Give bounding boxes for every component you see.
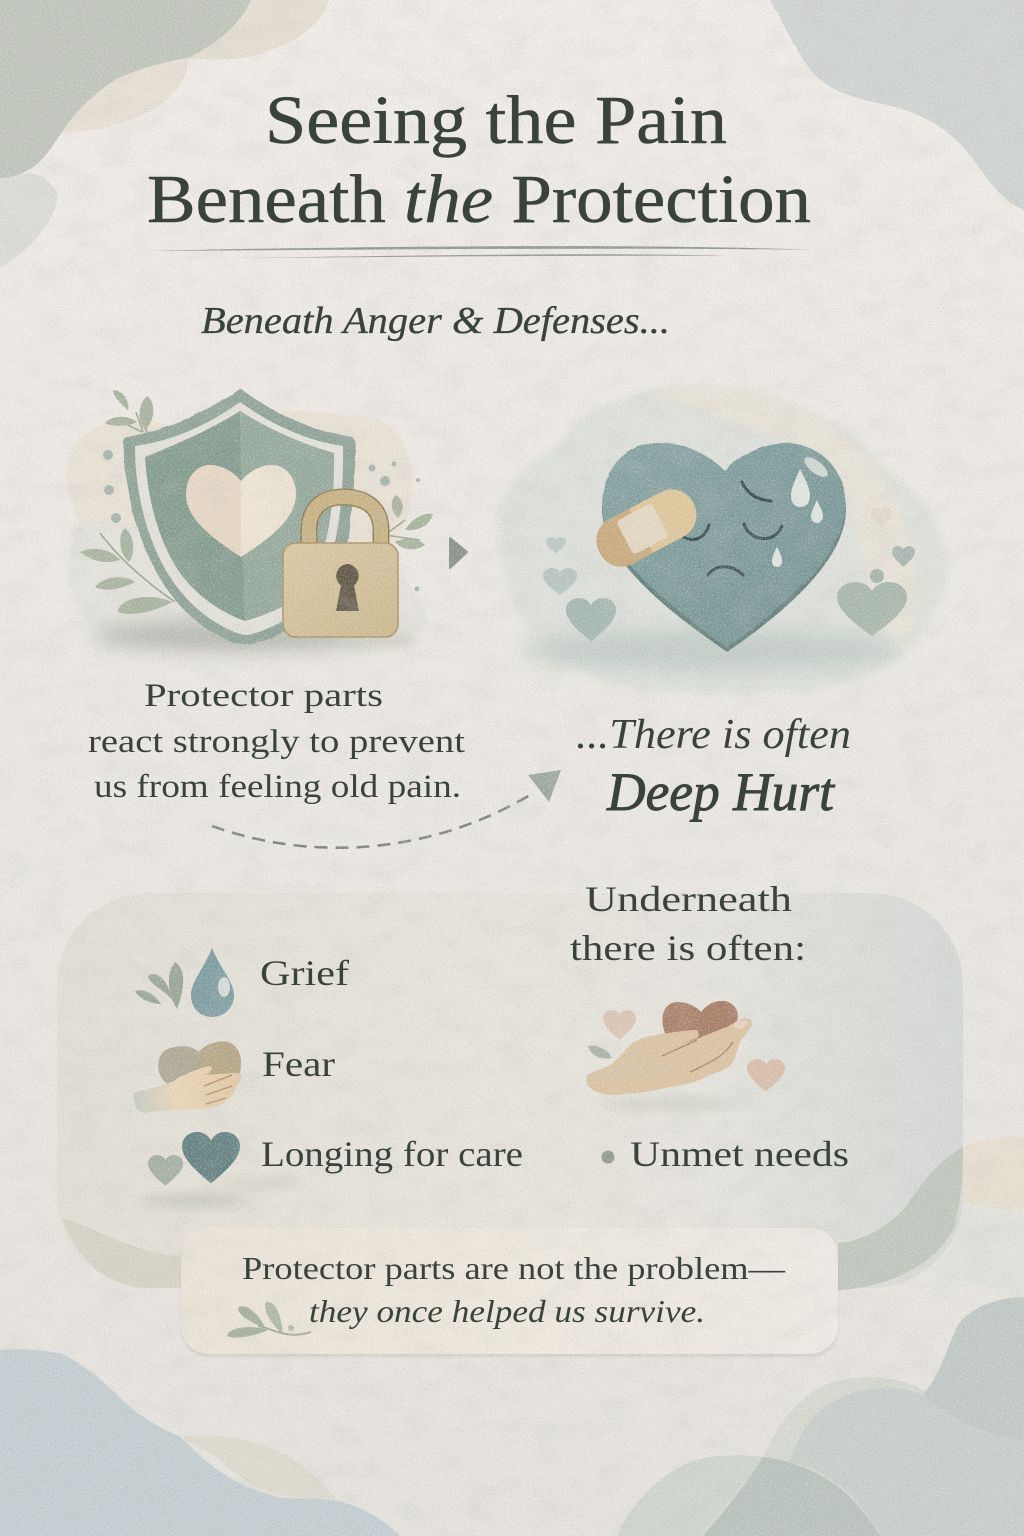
wash: bottom left beige [180,1436,337,1500]
lower wash [68,525,430,649]
wash: bottom right A [874,1297,1024,1536]
text: deep hurt: Deep Hurt [606,762,836,822]
panel background [57,893,963,1288]
wash: bottom left blue [0,1349,400,1536]
wash: top left beige upper [188,0,329,60]
icon: heart held by hand [134,1041,242,1113]
keyhole [336,564,359,611]
callout text: they once helped us survive. [309,1293,705,1329]
panel: underneath [57,893,963,1290]
panel ground wash right [224,1179,300,1187]
ground wash [520,630,900,670]
shield body [123,388,355,645]
label: grief: Grief [260,953,349,993]
shield inner right [240,411,334,621]
illustration: hurting heart [497,385,947,695]
heading: underneath [570,879,806,968]
shield heart [186,465,296,557]
icon: leaf sprig [227,1302,311,1338]
callout text [242,1250,786,1329]
callout shadow [181,1231,838,1357]
padlock shackle [309,497,381,546]
bandage [588,481,705,575]
right ground shadow [340,632,420,648]
panel corner shade [62,1218,181,1288]
small hearts [543,508,915,641]
wash: bottom right C [617,1455,800,1536]
dots [103,450,420,592]
wash: top left pale [0,173,58,268]
label: fear: Fear [262,1044,335,1084]
text: protector parts: Protector parts [144,678,383,714]
bullet [602,1150,614,1164]
leaves [80,390,433,614]
callout text: Protector parts are not the problem— [242,1250,786,1286]
wash: right lower [935,1205,1024,1295]
cloud wash [497,388,947,695]
illustration: shield and padlock [67,388,433,651]
wash: bottom right overlap [703,1457,880,1536]
icon: hand holding heart [586,1001,785,1109]
wash: bottom right fill [790,1388,1024,1536]
panel corner bottom right [838,1147,963,1290]
wash: top left green [0,0,251,178]
heading: underneath: Underneath [585,879,792,919]
padlock body [283,543,398,637]
padlock shackle fill [309,497,381,546]
wash: top left beige lower [62,60,188,133]
text: protector parts [88,678,465,805]
wash: bottom right B [700,1377,1024,1536]
ground shadow [90,621,370,651]
wash behind shield [67,411,412,560]
main heart shadow [602,447,846,652]
wash: top right [770,0,1024,210]
shield light band [135,402,343,635]
beige cloud wash [650,385,918,650]
title: Seeing the Pain [265,82,727,158]
icon: water drop with leaves [135,948,234,1017]
main heart [602,443,846,648]
text: protector parts: react strongly to prevent [88,724,465,760]
callout: background [181,1228,838,1357]
label: longing for care: Longing for care [261,1134,523,1174]
text: deep hurt [576,712,851,822]
title: Beneath the Protection [147,161,811,237]
small arrow between illustrations [450,538,467,568]
tears [772,454,831,567]
icon: two hearts [148,1132,240,1186]
heading: underneath: there is often: [570,928,806,968]
panel ground wash [140,1196,250,1206]
title underline [150,246,813,258]
text: deep hurt: ...There is often [576,712,851,758]
shield inner left [145,411,245,621]
text: protector parts: us from feeling old pain. [94,769,461,805]
wash: right beige [963,1137,1024,1215]
face [680,482,782,575]
label: unmet needs: Unmet needs [630,1134,849,1174]
subtitle: Beneath Anger & Defenses... [201,300,670,342]
dashed curved arrow [212,770,561,848]
title [147,82,811,237]
callout panel [181,1228,838,1354]
